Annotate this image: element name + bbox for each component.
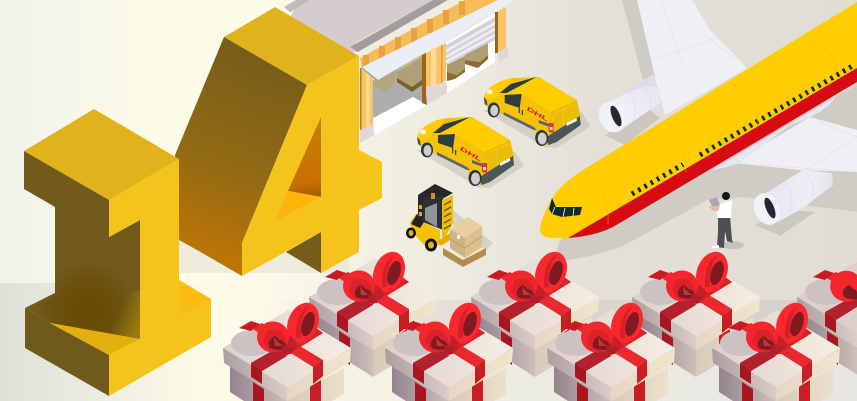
dock opening one xyxy=(373,53,422,118)
number 4 under leg xyxy=(286,232,321,273)
base block left xyxy=(360,124,374,143)
wall column right xyxy=(495,7,506,53)
pallet xyxy=(443,248,486,267)
dock ramp one xyxy=(374,97,427,135)
forklift body xyxy=(410,213,440,248)
lower wing xyxy=(733,117,857,172)
number 4 front face xyxy=(242,56,382,276)
number 4 arm highlight xyxy=(359,150,382,175)
number 4 hole interior xyxy=(288,117,321,197)
number 1 shaft shading xyxy=(25,260,140,339)
dock opening two xyxy=(446,13,495,93)
gift front row 2 xyxy=(385,298,513,401)
gift front row 1 xyxy=(223,298,351,401)
pallet boxes in dock two xyxy=(447,43,488,81)
forklift mast xyxy=(442,195,453,243)
wall column left xyxy=(360,68,373,130)
number 4 top face xyxy=(224,7,359,85)
canopy xyxy=(362,0,515,80)
number 1 xyxy=(24,109,211,396)
gift front row 3 xyxy=(547,298,675,401)
gift back row 2 xyxy=(471,247,599,377)
cockpit windows xyxy=(549,198,582,217)
forklift fork xyxy=(438,233,450,246)
logo text: DHL xyxy=(527,106,549,124)
warehouse roof xyxy=(290,0,433,52)
ground band bottom xyxy=(215,352,857,401)
number 1 front face xyxy=(109,159,211,396)
gift front row 4 xyxy=(712,298,840,401)
logo text: DHL xyxy=(460,146,482,164)
base block middle xyxy=(426,82,447,105)
cargo box xyxy=(450,217,482,238)
fuselage underside xyxy=(712,97,835,170)
upper wing xyxy=(637,0,747,115)
wall stripes xyxy=(360,0,500,70)
forklift cab xyxy=(418,184,453,203)
engine right xyxy=(749,170,833,229)
warehouse xyxy=(284,0,515,143)
forklift xyxy=(406,184,493,267)
cabin windows front xyxy=(632,164,683,194)
van rear xyxy=(483,77,591,148)
gift back row 1 xyxy=(309,247,437,377)
number 1 foot top xyxy=(50,323,140,355)
cabin windows rear xyxy=(700,64,855,155)
van front xyxy=(416,117,524,188)
gift back row 3 xyxy=(632,247,760,377)
number 1 left base face xyxy=(25,308,109,396)
fuselage red stripe xyxy=(568,68,857,238)
number shadow strip xyxy=(179,240,349,273)
number 1 shaft shadow face xyxy=(24,151,140,339)
fuselage yellow xyxy=(540,2,857,238)
person xyxy=(709,192,744,249)
number 1 foot highlight xyxy=(179,280,211,316)
plane xyxy=(540,0,857,238)
ground band left xyxy=(0,283,210,401)
plane shadows xyxy=(553,0,857,262)
engine left xyxy=(594,74,660,137)
pallet boxes in dock one xyxy=(373,54,422,92)
forklift wheels xyxy=(406,228,416,238)
ground band right xyxy=(260,300,857,352)
number 4 xyxy=(175,7,382,276)
wall column middle xyxy=(422,43,446,103)
number 1 top face xyxy=(24,109,179,200)
base block right xyxy=(498,47,508,62)
fuselage panel lines xyxy=(584,35,836,224)
number 4 left face xyxy=(175,37,307,276)
gift back row 4, cut by the right edge xyxy=(797,262,857,374)
